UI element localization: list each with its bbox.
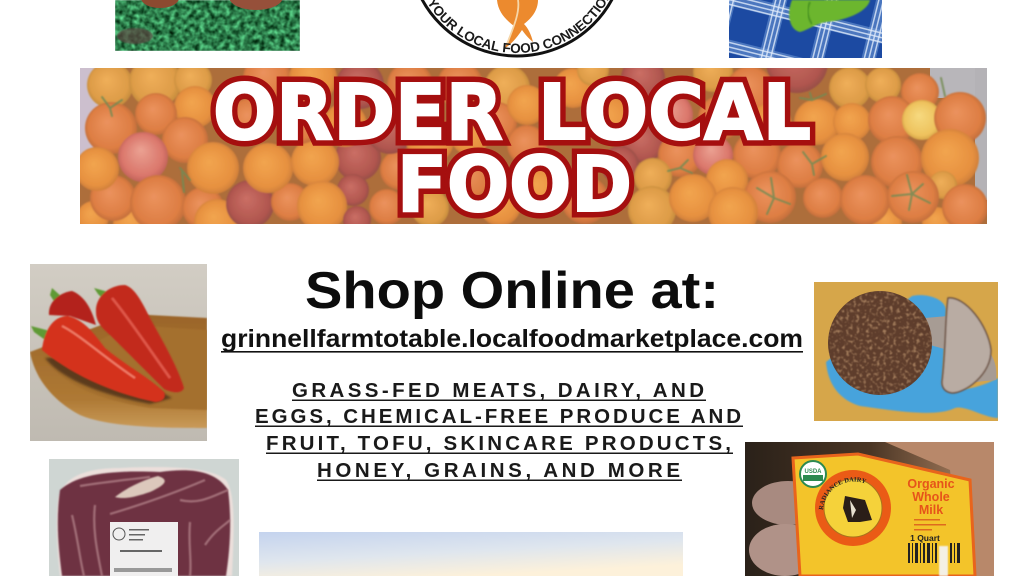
icon: usda organic seal — [800, 461, 826, 487]
text block: product list: FRUIT, TOFU, SKINCARE PRODUCTS, — [266, 432, 731, 455]
icon: orange ribbon flame — [497, 0, 538, 48]
text: organic whole milk — [908, 478, 954, 514]
photo: red peppers on wooden tray — [30, 264, 207, 441]
text block: product list: GRASS-FED MEATS, DAIRY, AND — [292, 379, 704, 402]
title: order local food: ORDER — [213, 69, 503, 158]
photo: green pepper on blue plaid — [729, 0, 882, 58]
label: yellow milk carton: 1 Quart — [910, 533, 940, 543]
photo: packaged beef — [49, 459, 239, 576]
title: order local food: FOOD — [397, 141, 632, 230]
title: order local food — [213, 69, 811, 230]
text: organic whole milk: Milk — [919, 503, 943, 517]
heading: shop online at: Shop Online at: — [305, 262, 719, 320]
title: order local food: ORDER — [213, 69, 503, 158]
photo: tomato plants — [115, 0, 300, 51]
barcode — [908, 543, 960, 563]
photo: whole grain bread on blue plate — [814, 282, 998, 421]
title: order local food: LOCAL — [538, 69, 811, 158]
photo: organic whole milk label — [745, 442, 994, 576]
icon: radiance dairy seal — [815, 470, 891, 546]
text block: product list — [255, 379, 743, 482]
text block: product list: HONEY, GRAINS, AND MORE — [317, 459, 680, 482]
text: organic whole milk: Whole — [912, 490, 950, 504]
title: order local food: FOOD — [397, 141, 632, 230]
title: order local food: LOCAL — [538, 69, 811, 158]
text block: product list: EGGS, CHEMICAL-FREE PRODUCE AND — [255, 405, 741, 428]
photo: sky at sunset — [259, 532, 683, 576]
link: marketplace url: grinnellfarmtotable.localfoodmarketplace.com — [221, 325, 803, 353]
text: organic whole milk: Organic — [907, 477, 955, 491]
banner: tomatoes photo — [80, 68, 987, 224]
icon: usda organic seal: USDA — [804, 469, 822, 475]
icon: radiance dairy seal: RADIANCE DAIRY — [818, 477, 867, 510]
label: yellow milk carton — [791, 452, 976, 576]
small label lines — [914, 519, 946, 530]
